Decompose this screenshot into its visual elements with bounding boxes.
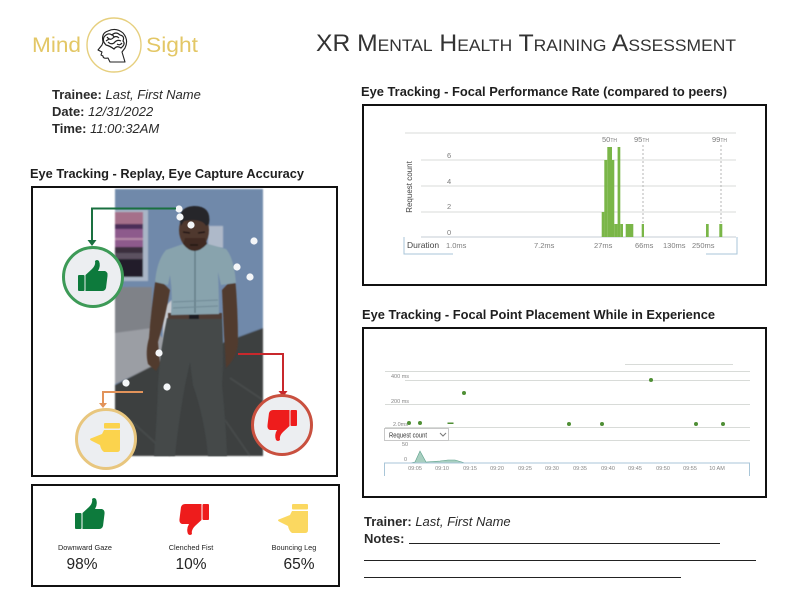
metric: bouncing leg: Bouncing Leg xyxy=(272,543,316,552)
metric: downward gaze: Downward Gaze xyxy=(58,543,112,552)
logo circle with brain and head xyxy=(87,18,141,72)
histogram chart: 130ms xyxy=(663,241,686,250)
scatter and timeline chart: 2.0ms xyxy=(393,422,408,428)
scatter and timeline chart: 09:10 xyxy=(435,466,449,472)
histogram chart: 7.2ms xyxy=(534,241,555,250)
arrow: orange connector xyxy=(99,392,143,408)
scatter and timeline chart: 09:40 xyxy=(601,466,615,472)
trainee details xyxy=(52,87,201,136)
histogram chart: Duration xyxy=(407,240,439,250)
icon: thumbs down badge xyxy=(252,396,312,454)
dropdown: request count xyxy=(384,428,448,440)
logo word: Mind: Mind xyxy=(32,34,81,57)
scatter and timeline chart: 09:45 xyxy=(628,466,642,472)
logo word: Sight: Sight xyxy=(146,34,198,57)
arrow: red connector xyxy=(238,354,288,397)
session time: Time: 11:00:32AM xyxy=(52,121,159,136)
metric: downward gaze xyxy=(58,498,112,573)
trainer notes xyxy=(364,514,756,578)
icon: pointing hand badge xyxy=(76,410,136,468)
session date: Date: 12/31/2022 xyxy=(52,104,154,119)
logo: Mind Sight xyxy=(32,18,198,72)
arrow: green connector xyxy=(88,208,176,246)
histogram chart: 50TH xyxy=(602,135,617,144)
heading: replay: Eye Tracking - Replay, Eye Capture Accuracy xyxy=(30,167,304,181)
panel: replay and eye capture xyxy=(32,187,337,476)
histogram chart: 99TH xyxy=(712,135,727,144)
dropdown: request count: Request count xyxy=(389,432,427,440)
title: XR Mental Health Training Assessment xyxy=(316,30,736,57)
scatter and timeline chart: 09:30 xyxy=(545,466,559,472)
scatter and timeline chart: 09:55 xyxy=(683,466,697,472)
panel: focal performance chart xyxy=(363,105,766,285)
heading: focal performance rate: Eye Tracking - Focal Performance Rate (compared to peers) xyxy=(361,85,727,99)
scatter and timeline chart: 09:15 xyxy=(463,466,477,472)
scatter and timeline chart: 09:25 xyxy=(518,466,532,472)
icon: thumbs up badge xyxy=(64,248,122,306)
histogram chart xyxy=(404,133,737,254)
eye capture points xyxy=(122,205,258,391)
histogram chart: 4 xyxy=(447,177,451,186)
scatter and timeline chart: 10 AM xyxy=(709,466,725,472)
metric: bouncing leg xyxy=(272,504,316,573)
scatter and timeline chart xyxy=(384,364,750,476)
histogram chart: 95TH xyxy=(634,135,649,144)
metric: clenched fist: 10% xyxy=(175,556,207,573)
notes label: Notes: xyxy=(364,531,404,546)
scatter and timeline chart: 09:50 xyxy=(656,466,670,472)
trainer name: Trainer: Last, First Name xyxy=(364,514,511,529)
heading: focal point placement: Eye Tracking - Focal Point Placement While in Experience xyxy=(362,308,715,322)
histogram chart: 250ms xyxy=(692,241,715,250)
scatter and timeline chart: 09:35 xyxy=(573,466,587,472)
histogram chart: 6 xyxy=(447,151,451,160)
scatter and timeline chart: 400 ms xyxy=(391,374,409,380)
scatter and timeline chart: 09:05 xyxy=(408,466,422,472)
histogram chart: 27ms xyxy=(594,241,613,250)
histogram chart: 1.0ms xyxy=(446,241,467,250)
scatter and timeline chart: 09:20 xyxy=(490,466,504,472)
histogram chart: Request count xyxy=(405,160,414,213)
scatter and timeline chart: 200 ms xyxy=(391,399,409,405)
notes lines xyxy=(364,544,756,578)
metric: downward gaze: 98% xyxy=(66,556,98,573)
metric: clenched fist: Clenched Fist xyxy=(169,543,213,552)
histogram chart: 0 xyxy=(447,228,451,237)
histogram chart: 2 xyxy=(447,202,451,211)
panel: focal point placement chart xyxy=(363,328,766,497)
replay scene image xyxy=(115,189,263,456)
panel: behaviour summary xyxy=(32,485,339,586)
figure: trainee avatar xyxy=(147,206,238,456)
scatter and timeline chart: 0 xyxy=(404,457,407,463)
scatter and timeline chart: 50 xyxy=(402,442,408,448)
metric: bouncing leg: 65% xyxy=(283,556,315,573)
histogram chart: 66ms xyxy=(635,241,654,250)
metric: clenched fist xyxy=(169,504,213,573)
trainee name: Trainee: Last, First Name xyxy=(52,87,201,102)
